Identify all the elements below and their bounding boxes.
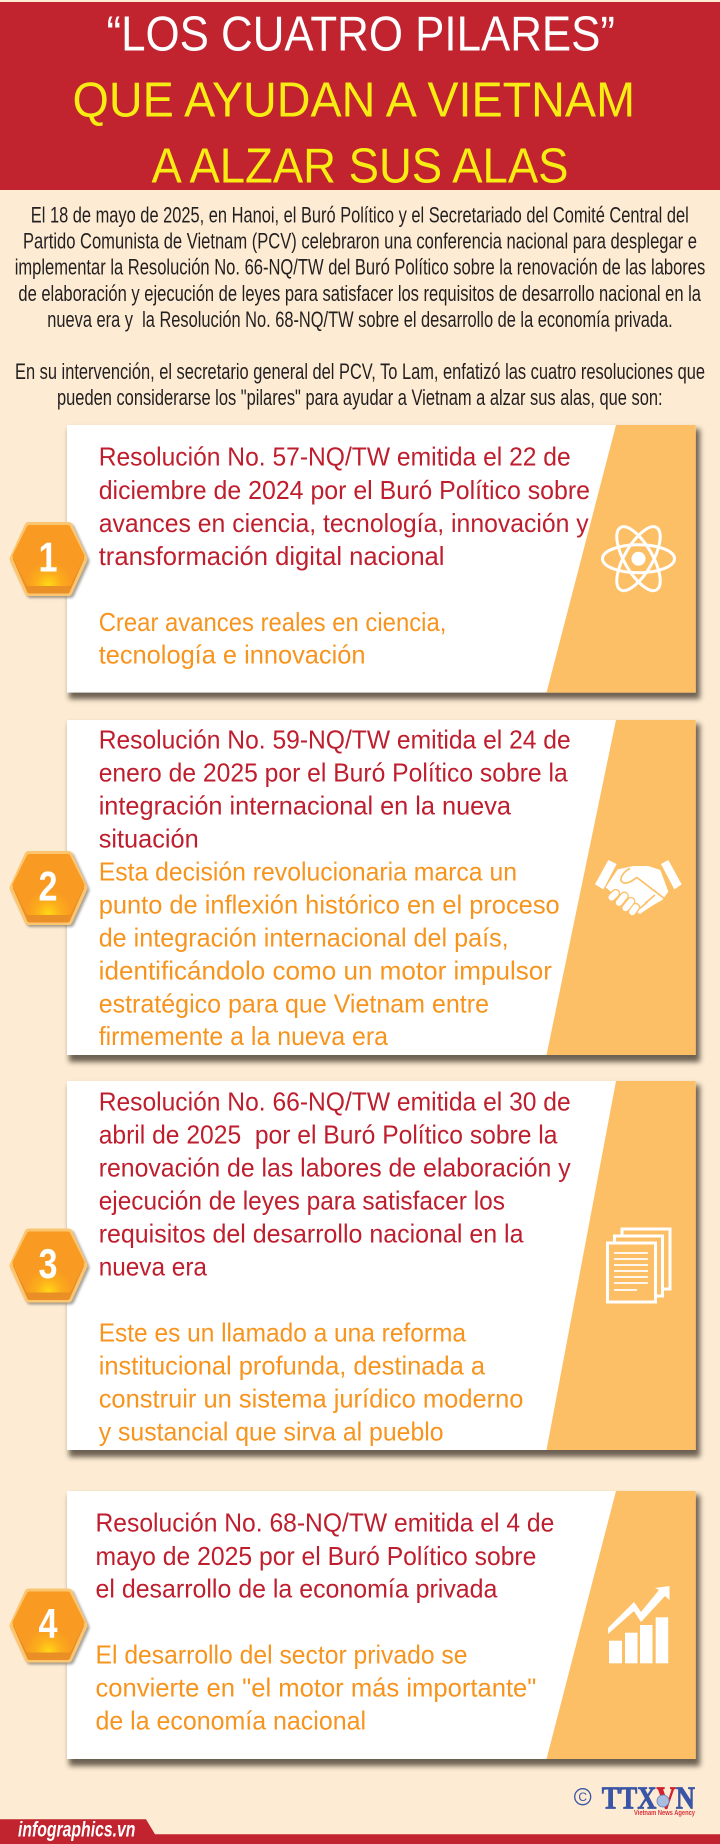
title line: que ayudan a vietnam: QUE AYUDAN A VIETNAM xyxy=(72,74,635,128)
resolution 4 text xyxy=(96,1508,554,1603)
resolution 1 text xyxy=(99,442,590,571)
icon: handshake xyxy=(595,860,682,914)
badge: number 4: 4 xyxy=(38,1600,58,1647)
resolution 1 text: Resolución No. 57-NQ/TW emitida el 22 de xyxy=(99,442,571,472)
logo: TTXVN copyright: TTXVN xyxy=(602,1779,695,1815)
resolution 3 text: nueva era xyxy=(99,1252,207,1282)
intro paragraph 2 xyxy=(15,359,705,410)
resolution 4 text: Resolución No. 68-NQ/TW emitida el 4 de xyxy=(96,1508,554,1538)
header banner xyxy=(0,2,720,194)
resolution 3 text: requisitos del desarrollo nacional en la xyxy=(99,1218,524,1248)
badge: number 2 xyxy=(14,855,86,923)
badge: number 2: 2 xyxy=(38,863,58,910)
resolution 3 text: Resolución No. 66-NQ/TW emitida el 30 de xyxy=(99,1087,571,1117)
resolution 2 summary: Esta decisión revolucionaria marca un xyxy=(99,857,517,887)
resolution 4 text: el desarrollo de la economía privada xyxy=(96,1573,498,1603)
resolution 1 summary: Crear avances reales en ciencia, xyxy=(99,607,446,637)
footer bar xyxy=(0,1819,720,1844)
resolution 1 text: transformación digital nacional xyxy=(99,541,444,571)
resolution 3 text: abril de 2025 por el Buró Político sobre la xyxy=(99,1119,558,1149)
panel: resolution 3 xyxy=(67,1081,700,1457)
badge: number 3 xyxy=(14,1232,86,1300)
resolution 1 text: avances en ciencia, tecnología, innovación y xyxy=(99,508,589,538)
title line: los cuatro pilares: “LOS CUATRO PILARES” xyxy=(106,8,615,62)
icon: growth chart xyxy=(608,1586,670,1663)
resolution 3 summary: institucional profunda, destinada a xyxy=(99,1350,486,1380)
resolution 4 summary: El desarrollo del sector privado se xyxy=(96,1639,468,1669)
resolution 2 summary: identificándolo como un motor impulsor xyxy=(99,955,552,985)
resolution 1 summary xyxy=(99,607,446,670)
logo: TTXVN copyright: C xyxy=(578,1790,587,1804)
panel: resolution 1 xyxy=(67,425,700,699)
resolution 2 summary: punto de inflexión histórico en el proceso xyxy=(99,889,560,919)
badge: number 4 xyxy=(14,1592,86,1660)
logo: TTXVN copyright: Vietnam News Agency xyxy=(634,1810,695,1817)
badge: number 1: 1 xyxy=(38,534,58,581)
resolution 2 text: integración internacional en la nueva xyxy=(99,790,512,820)
resolution 4 text: mayo de 2025 por el Buró Político sobre xyxy=(96,1541,536,1571)
intro paragraph 1 xyxy=(15,203,705,332)
resolution 2 summary: firmemente a la nueva era xyxy=(99,1021,389,1051)
resolution 3 summary: construir un sistema jurídico moderno xyxy=(99,1384,523,1414)
resolution 2 summary: de integración internacional del país, xyxy=(99,922,509,952)
resolution 3 summary xyxy=(99,1318,523,1446)
resolution 2 summary xyxy=(99,857,560,1051)
badge: number 3: 3 xyxy=(38,1240,58,1287)
panel: resolution 2 xyxy=(67,720,700,1062)
badge: number 1 xyxy=(14,526,86,594)
resolution 2 text xyxy=(99,724,571,854)
title line: a alzar sus alas: A ALZAR SUS ALAS xyxy=(152,140,568,194)
icon: atom xyxy=(602,521,674,597)
resolution 2 text: enero de 2025 por el Buró Político sobre la xyxy=(99,758,568,788)
resolution 4 summary: convierte en "el motor más importante" xyxy=(96,1673,536,1703)
footer source label: infographics.vn xyxy=(18,1819,135,1842)
icon: documents xyxy=(608,1229,670,1302)
resolution 2 text: Resolución No. 59-NQ/TW emitida el 24 de xyxy=(99,724,571,754)
resolution 1 text: diciembre de 2024 por el Buró Político sobre xyxy=(99,475,590,505)
resolution 4 summary xyxy=(96,1639,536,1735)
panel: resolution 4 xyxy=(67,1491,700,1766)
resolution 3 text xyxy=(99,1087,571,1282)
resolution 2 text: situación xyxy=(99,824,199,854)
resolution 3 summary: y sustancial que sirva al pueblo xyxy=(99,1416,444,1446)
resolution 3 text: renovación de las labores de elaboración y xyxy=(99,1153,571,1183)
resolution 2 summary: estratégico para que Vietnam entre xyxy=(99,988,489,1018)
resolution 3 summary: Este es un llamado a una reforma xyxy=(99,1318,467,1348)
resolution 4 summary: de la economía nacional xyxy=(96,1705,366,1735)
resolution 1 summary: tecnología e innovación xyxy=(99,640,365,670)
resolution 3 text: ejecución de leyes para satisfacer los xyxy=(99,1185,505,1215)
